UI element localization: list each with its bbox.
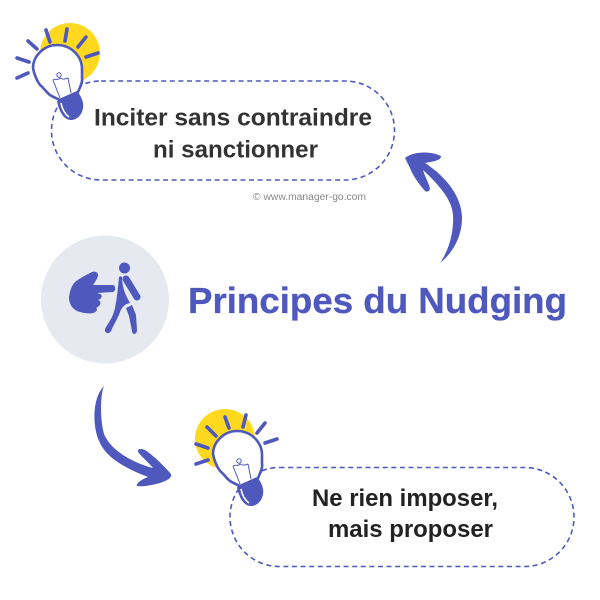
arrow: curved arrow down to bottom pill: [94, 386, 171, 486]
panel: top principle pill: [52, 81, 394, 180]
text: inciter sans contraindre: ni sanctionner: [153, 136, 318, 164]
icon: bottom light bulb: [195, 409, 277, 506]
text: ne rien imposer: mais proposer: [328, 516, 493, 543]
text: inciter sans contraindre: Inciter sans contraindre: [94, 104, 372, 132]
icon: top light bulb: [17, 23, 100, 120]
icon: walking person: [105, 262, 137, 334]
caption: copyright: © www.manager-go.com: [253, 192, 366, 203]
title: Principes du Nudging: [188, 280, 567, 321]
panel: bottom principle pill: [230, 468, 574, 566]
icon: pointing hand: [69, 272, 115, 313]
icon: grey circle with hand and walking person: [41, 236, 169, 364]
arrow: curved arrow up to top pill: [405, 152, 462, 263]
text: ne rien imposer: Ne rien imposer,: [312, 485, 498, 512]
